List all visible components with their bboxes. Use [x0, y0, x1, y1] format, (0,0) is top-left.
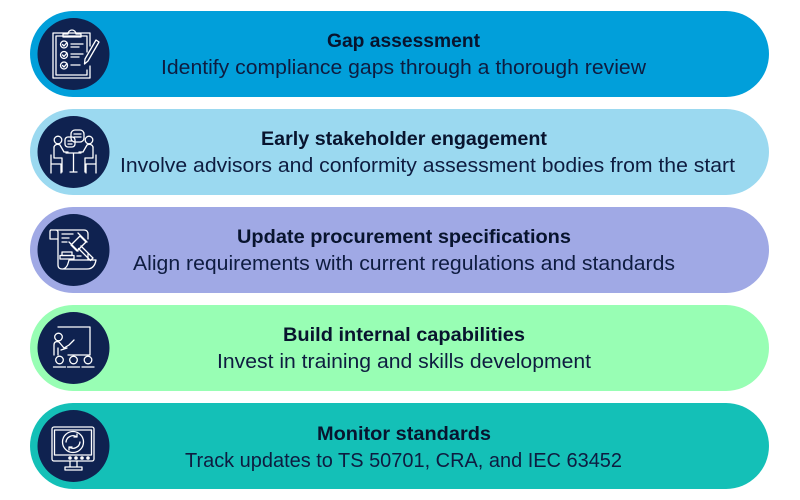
- icon badge: people at table: [38, 116, 110, 188]
- panel: gap assessment: [30, 11, 769, 97]
- heading: Build internal capabilities: [283, 324, 525, 346]
- text: Identify compliance gaps through a thorough review: [161, 57, 647, 79]
- heading: Early stakeholder engagement: [261, 128, 548, 150]
- text: Invest in training and skills development: [217, 351, 591, 373]
- heading: Update procurement specifications: [237, 226, 571, 248]
- text: Align requirements with current regulations and standards: [133, 253, 675, 275]
- panel: build internal capabilities: [30, 305, 769, 391]
- text: Track updates to TS 50701, CRA, and IEC 63452: [185, 450, 622, 472]
- panel: update procurement specifications: [30, 207, 769, 293]
- text: Involve advisors and conformity assessment bodies from the start: [120, 155, 735, 177]
- panel: monitor standards: [30, 403, 769, 489]
- icon badge: trainer and audience: [38, 312, 110, 384]
- heading: Monitor standards: [317, 423, 491, 445]
- heading: Gap assessment: [327, 30, 480, 52]
- icon badge: monitor with sync: [38, 410, 110, 482]
- icon badge: clipboard checklist: [38, 18, 110, 90]
- panel: early stakeholder engagement: [30, 109, 769, 195]
- icon badge: gavel on scroll: [38, 214, 110, 286]
